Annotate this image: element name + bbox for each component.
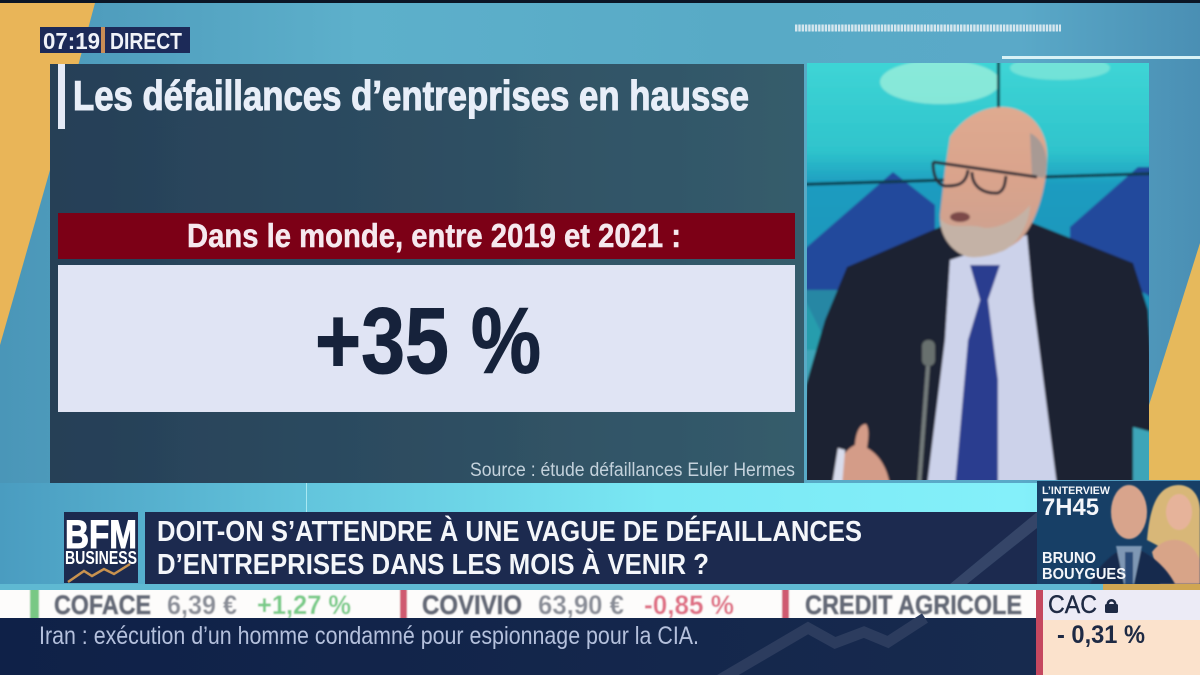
suit [800,222,1156,486]
value box: +35 % [315,288,541,393]
beard [940,205,1030,257]
man portrait [1090,485,1175,584]
woman portrait [1147,485,1200,584]
interview promo: L’INTERVIEW [1042,485,1111,497]
stock ticker: CREDIT AGRICOLE [805,590,1022,620]
stock ticker: COVIVIO [422,590,522,620]
headline banner [145,512,1037,584]
stock ticker [0,590,1036,618]
microphone [919,340,935,486]
BFM Business logo [64,512,138,583]
hair side [1030,133,1046,178]
headline banner: DOIT-ON S’ATTENDRE À UNE VAGUE DE DÉFAILLANCES [157,514,862,548]
head [940,107,1047,257]
hand [841,422,891,480]
CAC index: - 0,31 % [1057,621,1145,649]
stock ticker: 6,39 € [167,590,237,620]
speaker video [800,56,1156,486]
red banner: Dans le monde, entre 2019 et 2021 : [187,217,681,254]
icon: lock [1105,599,1118,613]
BFM Business logo: BUSINESS [65,548,137,568]
source: Source : étude défaillances Euler Hermes [470,460,795,481]
left yellow wedge [0,3,95,345]
right yellow wedge [1149,243,1200,480]
news crawl [0,618,1037,675]
CAC index: CAC [1048,591,1097,619]
timecode badge: DIRECT [110,28,182,54]
BFM Business logo: BFM [65,513,137,557]
stock ticker: COFACE [54,590,151,620]
shirt [927,235,1057,486]
headline banner: D’ENTREPRISES DANS LES MOIS À VENIR ? [157,547,709,581]
main panel [50,64,804,483]
stock ticker: -0,85 % [644,590,734,620]
news crawl: Iran : exécution d’un homme condamné pour espionnage pour la CIA. [39,622,699,650]
CAC index [1036,590,1200,675]
interview promo [1037,481,1200,584]
interview promo: BRUNO [1042,550,1096,567]
timecode badge: 07:19 [43,28,100,54]
mouth [950,212,970,222]
glasses [933,162,1037,193]
title accent bar [58,64,65,129]
title: Les défaillances d’entreprises en hausse [73,72,749,119]
red banner [58,213,795,259]
speaker [800,107,1156,486]
stock ticker: 63,90 € [538,590,624,620]
timecode badge [40,27,190,54]
interview promo: 7H45 [1042,494,1099,521]
stock ticker: +1,27 % [257,590,351,620]
tie [955,265,1000,486]
value box [58,265,795,412]
interview promo: BOUYGUES [1042,566,1126,583]
